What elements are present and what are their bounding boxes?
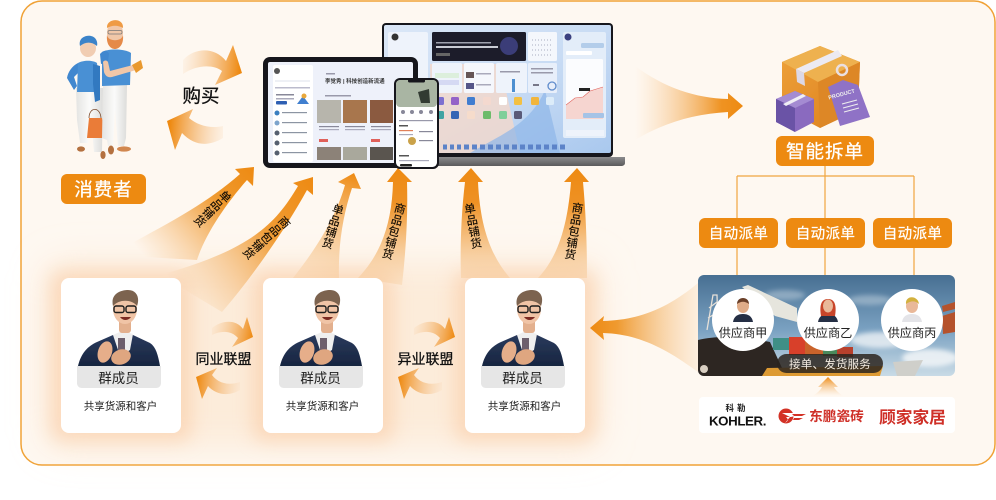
illustration: member <box>482 290 564 367</box>
button: auto dispatch 3: 自动派单 <box>883 226 942 242</box>
arrow labels: 单品铺货 <box>191 187 234 229</box>
arrow: brands to suppliers <box>811 377 845 397</box>
supplier B <box>797 289 859 351</box>
label: order and shipping service: 接单、发货服务 <box>789 357 871 371</box>
panel: brand logos <box>699 397 955 433</box>
arrow: bundle listing 1 <box>160 177 313 312</box>
arrow: single-item listing 1 <box>110 167 254 260</box>
panel: brand logos: 东鹏瓷砖 <box>809 408 864 424</box>
card: group member 1 <box>61 278 181 433</box>
arrow labels: 单品铺货 <box>319 201 346 251</box>
arrow: alliance back 1 <box>196 368 240 399</box>
member description: 共享货源和客户 <box>488 400 561 412</box>
man arm <box>103 60 136 77</box>
card: group member 3 <box>465 278 585 433</box>
clouds <box>765 290 958 367</box>
arrow labels: 商品包铺货 <box>562 200 584 261</box>
man torso <box>102 50 131 86</box>
illustration: member <box>280 290 362 367</box>
icon: product boxes: PRODUCT <box>828 88 856 101</box>
containers <box>773 338 789 350</box>
button: auto dispatch 1 <box>699 218 778 248</box>
glow behind card 3 <box>454 270 596 442</box>
label: order and shipping service <box>777 354 883 373</box>
supplier C: 供应商丙 <box>888 325 936 340</box>
device: tablet <box>263 57 418 168</box>
button: consumers <box>61 174 146 204</box>
crane <box>707 295 718 330</box>
arrow: bundle listing 3 <box>538 168 589 278</box>
glow behind card 2 <box>252 270 394 442</box>
connector lines <box>737 166 914 275</box>
device: laptop <box>382 23 625 166</box>
panel: suppliers photo <box>698 275 958 376</box>
cargo deck <box>762 366 883 376</box>
hull <box>698 337 790 376</box>
panel: brand logos: 顾家家居 <box>879 407 946 427</box>
button: auto dispatch 1: 自动派单 <box>709 226 768 242</box>
arrow: suppliers to group members <box>590 283 698 372</box>
card: group member 1: 群成员 <box>98 371 139 386</box>
arrow: single-item listing 2 <box>293 173 361 278</box>
supplier A: 供应商甲 <box>719 325 767 340</box>
arrow: alliance forward 1 <box>212 317 253 347</box>
arrow: alliance forward 2 <box>414 317 455 347</box>
arrow labels: 商品包铺货 <box>380 200 407 261</box>
button: auto dispatch 3 <box>873 218 952 248</box>
member label <box>481 366 565 388</box>
arrow: alliance back 2 <box>398 368 442 399</box>
member description: 共享货源和客户 <box>286 400 359 412</box>
panel: brand logos: KOHLER. <box>709 414 766 428</box>
woman arm <box>67 63 79 90</box>
card: group member 2: 群成员 <box>300 371 341 386</box>
glow behind card 1 <box>50 270 192 442</box>
supplier C <box>881 289 943 351</box>
member description: 共享货源和客户 <box>84 400 157 412</box>
icon: product boxes <box>776 46 870 132</box>
arrow: single-item listing 3 <box>458 168 510 278</box>
label: purchase: 购买 <box>182 86 220 106</box>
arrow: platform returns to consumer <box>167 109 223 150</box>
illustration: consumers <box>67 20 143 159</box>
card: group member 3: 群成员 <box>502 371 543 386</box>
illustration: member <box>78 290 160 367</box>
arrow labels: 商品包铺货 <box>240 213 293 262</box>
broad glow around member cards <box>45 262 600 448</box>
man legs <box>102 85 127 146</box>
arrow: bundle listing 2 <box>358 168 412 285</box>
woman torso <box>77 61 100 92</box>
supplier B: 供应商乙 <box>804 325 852 340</box>
card: group member 2 <box>263 278 383 433</box>
label: cross-industry alliance: 异业联盟 <box>398 351 454 367</box>
button: consumers: 消费者 <box>74 179 133 200</box>
button: smart order splitting <box>776 136 874 166</box>
arrow: platform to smart order splitting <box>635 66 743 140</box>
label: same-industry alliance: 同业联盟 <box>196 351 252 367</box>
woman legs <box>76 88 103 152</box>
member label <box>279 366 363 388</box>
ship superstructure <box>742 285 797 322</box>
device: tablet: 李觉秀 | 科技创造新流通 <box>325 77 385 85</box>
panel: brand logos: 科勒 <box>725 403 749 413</box>
device: phone <box>394 78 439 169</box>
button: auto dispatch 2 <box>786 218 865 248</box>
member label <box>77 366 161 388</box>
arrow labels: 单品铺货 <box>462 201 483 250</box>
arrow: consumer buys from platform <box>183 45 242 85</box>
button: smart order splitting: 智能拆单 <box>786 141 864 162</box>
arrow labels <box>191 187 584 262</box>
supplier A <box>712 289 774 351</box>
button: auto dispatch 2: 自动派单 <box>796 226 855 242</box>
